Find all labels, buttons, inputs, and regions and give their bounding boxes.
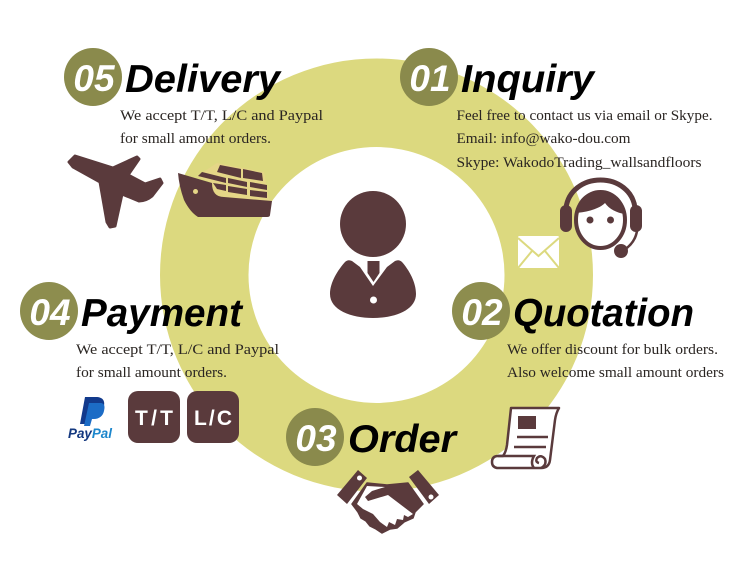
process ring xyxy=(160,59,593,492)
heading: order: Order xyxy=(348,418,458,461)
badge: T/T xyxy=(128,391,180,443)
payment text: We accept T/T, L/C and Paypal xyxy=(76,342,279,358)
heading: delivery: Delivery xyxy=(125,58,282,101)
heading: quotation: Quotation xyxy=(513,292,694,335)
badge 01 xyxy=(400,48,458,106)
step 01 inquiry xyxy=(400,48,712,268)
step 04 payment xyxy=(20,282,279,443)
badge 03 xyxy=(286,408,344,466)
inquiry text xyxy=(456,108,712,171)
icon: paypal logo xyxy=(68,397,113,441)
badge 04 xyxy=(20,282,78,340)
heading: payment: Payment xyxy=(81,292,244,335)
icon: headset agent xyxy=(560,180,642,258)
inquiry text: Feel free to contact us via email or Skype. xyxy=(456,108,712,124)
badge 02: 02 xyxy=(461,292,503,333)
badge 05 xyxy=(64,48,122,106)
badge: T/T: T/T xyxy=(135,407,173,430)
badge 05: 05 xyxy=(73,58,116,99)
badge 02 xyxy=(452,282,510,340)
badge: L/C: L/C xyxy=(194,407,232,430)
icon: handshake xyxy=(337,470,439,533)
step 02 quotation xyxy=(452,282,724,468)
icon: envelope xyxy=(518,236,559,268)
icon: central person xyxy=(330,191,416,318)
delivery text: We accept T/T, L/C and Paypal xyxy=(120,108,323,124)
inquiry text: Email: info@wako-dou.com xyxy=(456,131,631,147)
icon: container ship xyxy=(178,163,272,217)
icon: airplane xyxy=(69,156,162,227)
payment text xyxy=(76,342,279,381)
quotation text xyxy=(507,342,724,381)
quotation text: Also welcome small amount orders xyxy=(507,365,724,381)
inquiry text: Skype: WakodoTrading_wallsandfloors xyxy=(456,155,702,171)
quotation text: We offer discount for bulk orders. xyxy=(507,342,718,358)
badge 03: 03 xyxy=(295,418,337,459)
badge: L/C xyxy=(187,391,239,443)
payment text: for small amount orders. xyxy=(76,365,227,381)
badge 01: 01 xyxy=(409,58,451,99)
badge 04: 04 xyxy=(29,292,71,333)
step 03 order xyxy=(286,408,458,533)
delivery text xyxy=(120,108,323,147)
icon: document scroll xyxy=(492,408,559,468)
icon: paypal logo: PayPal xyxy=(68,425,113,441)
delivery text: for small amount orders. xyxy=(120,131,271,147)
step 05 delivery xyxy=(64,48,323,227)
heading: inquiry: Inquiry xyxy=(461,58,596,101)
